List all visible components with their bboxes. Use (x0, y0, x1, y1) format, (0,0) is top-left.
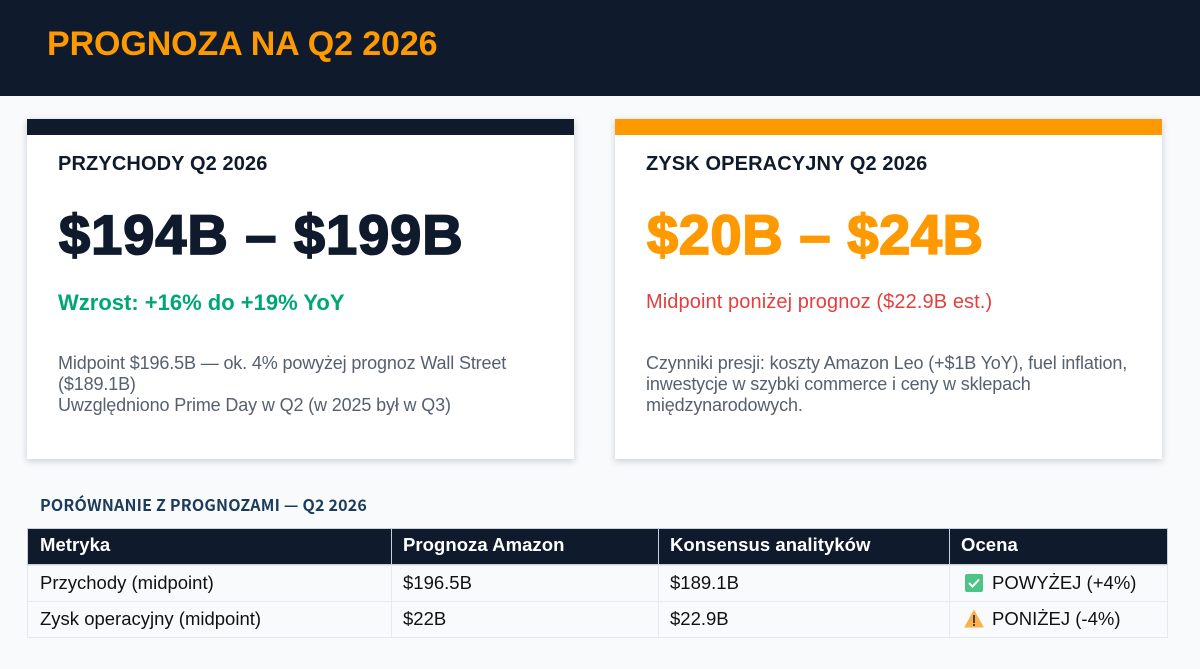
table row: revenue: $196.5B (403, 572, 472, 593)
icon: warning triangle (964, 610, 984, 628)
table heading: PORÓWNANIE Z PROGNOZAMI — Q2 2026 (40, 492, 367, 516)
icon: green check (965, 574, 983, 592)
profit notes: inwestycje w szybki commerce i ceny w sklepach (646, 374, 1031, 394)
revenue notes: Midpoint $196.5B — ok. 4% powyżej prognoz Wall Street (58, 353, 506, 373)
table header row: Prognoza Amazon (403, 534, 564, 555)
table row: revenue: POWYŻEJ (+4%) (992, 572, 1136, 593)
profit comparison: Midpoint poniżej prognoz ($22.9B est.) (646, 291, 992, 313)
title: PROGNOZA NA Q2 2026 (47, 25, 437, 63)
table header row: Ocena (961, 534, 1018, 555)
revenue heading: PRZYCHODY Q2 2026 (58, 153, 268, 175)
table row: profit: PONIŻEJ (-4%) (992, 608, 1120, 629)
header band (0, 0, 1200, 96)
revenue growth: Wzrost: +16% do +19% YoY (58, 290, 344, 315)
revenue notes (58, 353, 506, 415)
table row: revenue: Przychody (midpoint) (40, 572, 214, 593)
panel: operating profit (615, 119, 1162, 459)
table row: profit: $22.9B (670, 608, 729, 629)
profit range: $20B – $24B (647, 203, 984, 266)
panel: revenue (27, 119, 574, 459)
revenue range: $194B – $199B (59, 203, 464, 266)
table row: profit: Zysk operacyjny (midpoint) (40, 608, 261, 629)
table header row: Konsensus analityków (670, 534, 870, 555)
revenue accent bar (27, 119, 574, 135)
profit notes: Czynniki presji: koszty Amazon Leo (+$1B YoY), fuel inflation, (646, 353, 1127, 373)
profit notes: międzynarodowych. (646, 395, 803, 415)
table row: revenue: $189.1B (670, 572, 739, 593)
table header row: Metryka (40, 534, 110, 555)
profit heading: ZYSK OPERACYJNY Q2 2026 (646, 153, 927, 175)
revenue notes: Uwzględniono Prime Day w Q2 (w 2025 był w Q3) (58, 395, 451, 415)
revenue notes: ($189.1B) (58, 374, 136, 394)
profit notes (646, 353, 1127, 415)
table row: profit: $22B (403, 608, 446, 629)
profit accent bar (615, 119, 1162, 135)
